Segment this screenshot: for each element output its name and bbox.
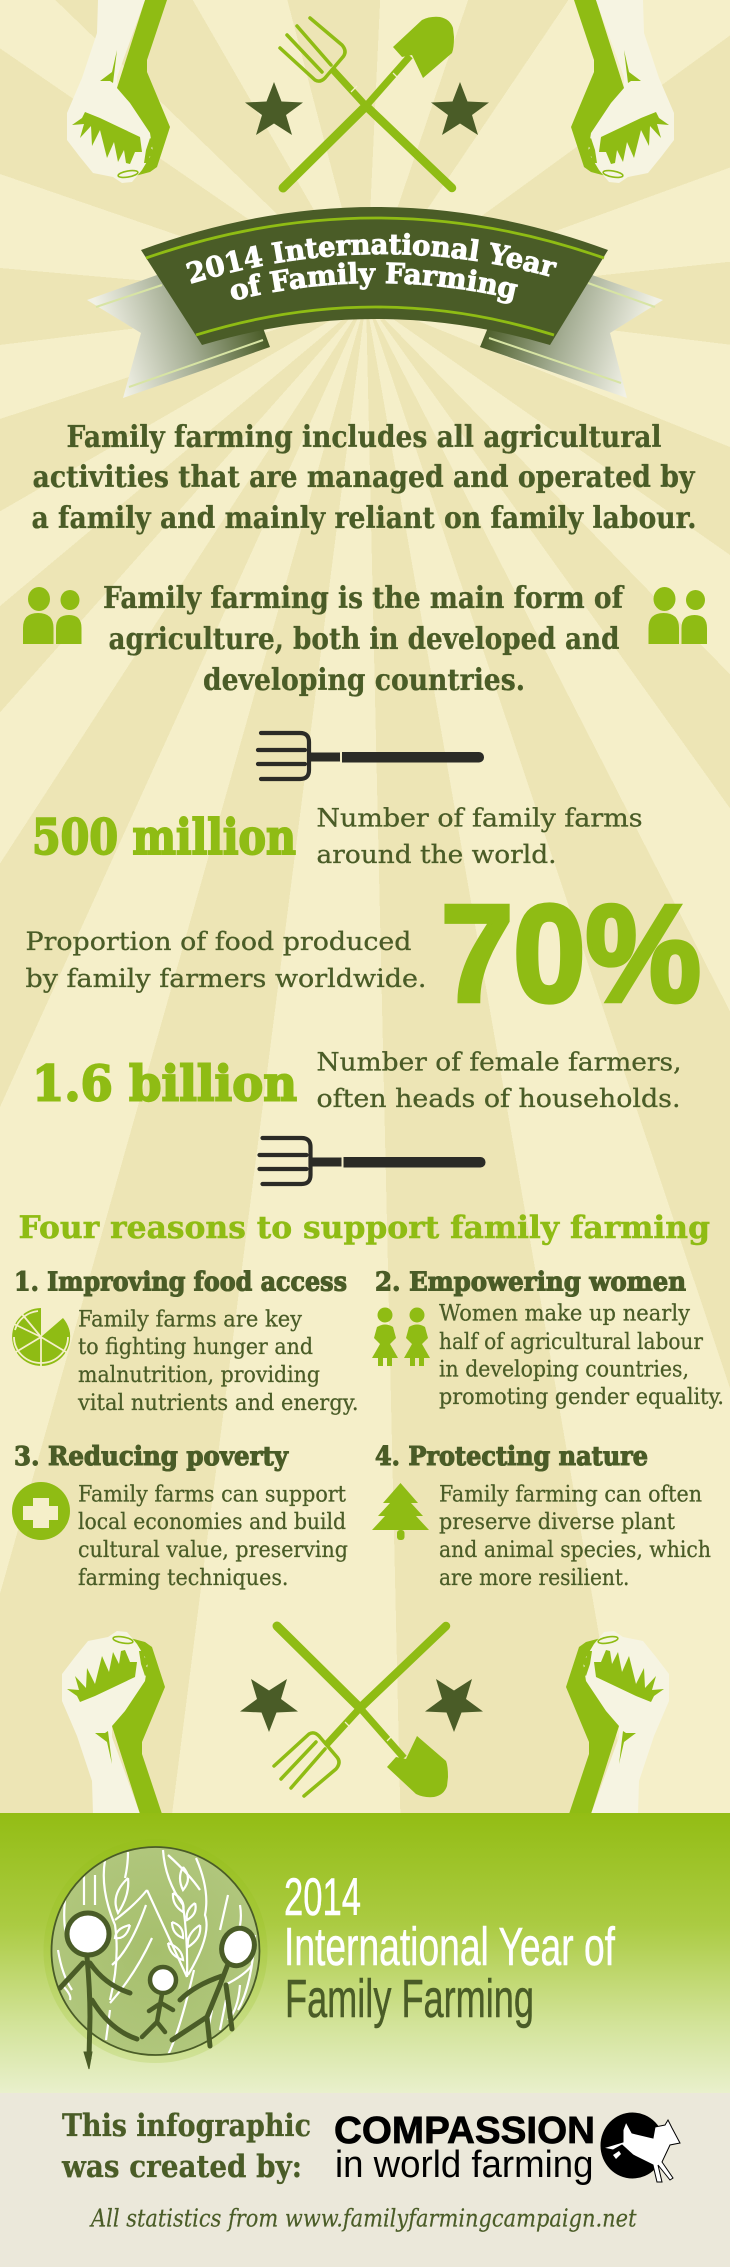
panel: reason 3 reducing poverty: 3. Reducing poverty	[14, 1442, 289, 1472]
panel: reason 3 reducing poverty: local economies and build	[78, 1510, 346, 1535]
panel: reason 4 protecting nature: are more resilient.	[439, 1566, 630, 1591]
text: main form of agriculture: Family farming is the main form of	[103, 581, 625, 616]
stat: 70 percent: 70%	[441, 877, 701, 1031]
panel: reason 2 empowering women: half of agricultural labour	[439, 1330, 703, 1355]
icon: bottom right star	[425, 1679, 483, 1732]
panel: footer	[0, 2093, 730, 2267]
panel: reason 4 protecting nature: Family farming can often	[439, 1482, 702, 1508]
panel: reason 2 empowering women: Women make up nearly	[439, 1302, 691, 1326]
icon: crossed pitchfork and shovel	[280, 17, 454, 188]
logo: Compassion in World Farming	[334, 2110, 680, 2186]
logo: Compassion in World Farming: COMPASSION	[334, 2110, 595, 2152]
icon: citrus slice	[12, 1308, 70, 1366]
intro text block	[32, 420, 696, 536]
stat: 500 million	[32, 804, 642, 869]
stat: 70 percent	[26, 877, 701, 1031]
icon: bottom left star	[240, 1679, 298, 1732]
panel: reason 1 improving food access: Family farms are key	[78, 1308, 303, 1332]
banner title text: 2014 International Year	[186, 232, 558, 284]
icon: pitchfork divider	[260, 1138, 486, 1184]
panel: reason 4 protecting nature	[372, 1442, 711, 1591]
ribbon lime stripes	[146, 218, 604, 335]
text: campaign title: 2014	[284, 1868, 361, 1927]
text: created by: was created by:	[61, 2149, 302, 2185]
icon: globe with leaping goat	[600, 2112, 680, 2182]
icon: right fist	[571, 0, 674, 183]
logo: family farming disc	[44, 1839, 268, 2069]
figure: child	[142, 1967, 176, 2037]
logo: Compassion in World Farming: in world farming	[335, 2144, 594, 2186]
icon: bottom right fist	[566, 1631, 669, 1814]
panel: reason 3 reducing poverty	[12, 1442, 348, 1591]
panel: reason 1 improving food access: 1. Improving food access	[14, 1268, 347, 1298]
icon: two women	[372, 1308, 430, 1366]
illustration: raised fists and crossed tools, bottom	[62, 1626, 669, 1814]
text: created by	[61, 2108, 311, 2185]
icon: people left	[23, 587, 82, 644]
icon: plus in circle	[12, 1482, 70, 1540]
heading: four reasons: Four reasons to support family farming	[18, 1210, 710, 1246]
panel: reason 1 improving food access: malnutrition, providing	[78, 1363, 320, 1388]
stat: 500 million: Number of family farms	[316, 804, 642, 832]
intro text block: Family farming includes all agricultural	[66, 420, 662, 455]
illustration: raised fists and crossed tools, top	[67, 0, 674, 188]
stat: 1.6 billion: often heads of households.	[316, 1084, 680, 1113]
panel: reason 3 reducing poverty: Family farms can support	[78, 1482, 346, 1508]
icon: left star	[245, 82, 303, 135]
icon: crossed pitchfork and shovel bottom	[274, 1626, 448, 1797]
panel: reason 1 improving food access	[12, 1268, 359, 1416]
panel: reason 4 protecting nature: preserve diverse plant	[439, 1510, 675, 1535]
panel: reason 2 empowering women: 2. Empowering women	[375, 1268, 686, 1298]
banner title text line 2: of Family Farming	[230, 262, 518, 304]
title ribbon banner	[87, 207, 663, 398]
icon: right star	[431, 82, 489, 135]
text: campaign title	[284, 1868, 616, 2029]
panel: reason 1 improving food access: vital nutrients and energy.	[77, 1391, 358, 1416]
text: statistics source: All statistics from www.familyfarmingcampaign.net	[89, 2204, 637, 2232]
icon: pitchfork divider	[258, 733, 484, 779]
panel: reason 2 empowering women: in developing countries,	[439, 1358, 689, 1382]
icon: people right	[648, 587, 707, 644]
icon: bottom left fist	[62, 1631, 165, 1814]
stat: 70 percent: Proportion of food produced	[26, 927, 412, 956]
figure: right adult	[172, 1924, 260, 2046]
figure: left adult	[60, 1913, 137, 2069]
text: main form of agriculture: developing countries.	[203, 663, 525, 698]
text: created by: This infographic	[62, 2108, 311, 2144]
text: main form of agriculture: agriculture, both in developed and	[108, 622, 620, 657]
ribbon tail right	[480, 275, 663, 398]
panel: green campaign band	[0, 1813, 730, 2093]
stat: 500 million: 500 million	[32, 808, 296, 866]
stat: 1.6 billion: 1.6 billion	[32, 1054, 297, 1112]
stat: 1.6 billion: Number of female farmers,	[316, 1048, 682, 1076]
icon: pine tree	[372, 1483, 429, 1540]
panel: reason 4 protecting nature: 4. Protecting nature	[375, 1442, 648, 1472]
icon: left fist	[67, 0, 170, 183]
stat: 70 percent: by family farmers worldwide.	[26, 964, 426, 993]
text: main form of agriculture	[103, 581, 625, 698]
stat: 1.6 billion	[32, 1048, 682, 1113]
text: campaign title: Family Farming	[285, 1969, 534, 2029]
panel: reason 3 reducing poverty: cultural value, preserving	[78, 1538, 348, 1563]
panel: reason 3 reducing poverty: farming techniques.	[78, 1566, 288, 1591]
panel: reason 2 empowering women	[372, 1268, 724, 1410]
stat: 500 million: around the world.	[316, 840, 556, 869]
ribbon main band	[141, 207, 608, 345]
ribbon tail left	[87, 275, 270, 398]
panel: reason 4 protecting nature: and animal species, which	[439, 1538, 711, 1563]
panel: reason 1 improving food access: to fighting hunger and	[78, 1335, 313, 1360]
